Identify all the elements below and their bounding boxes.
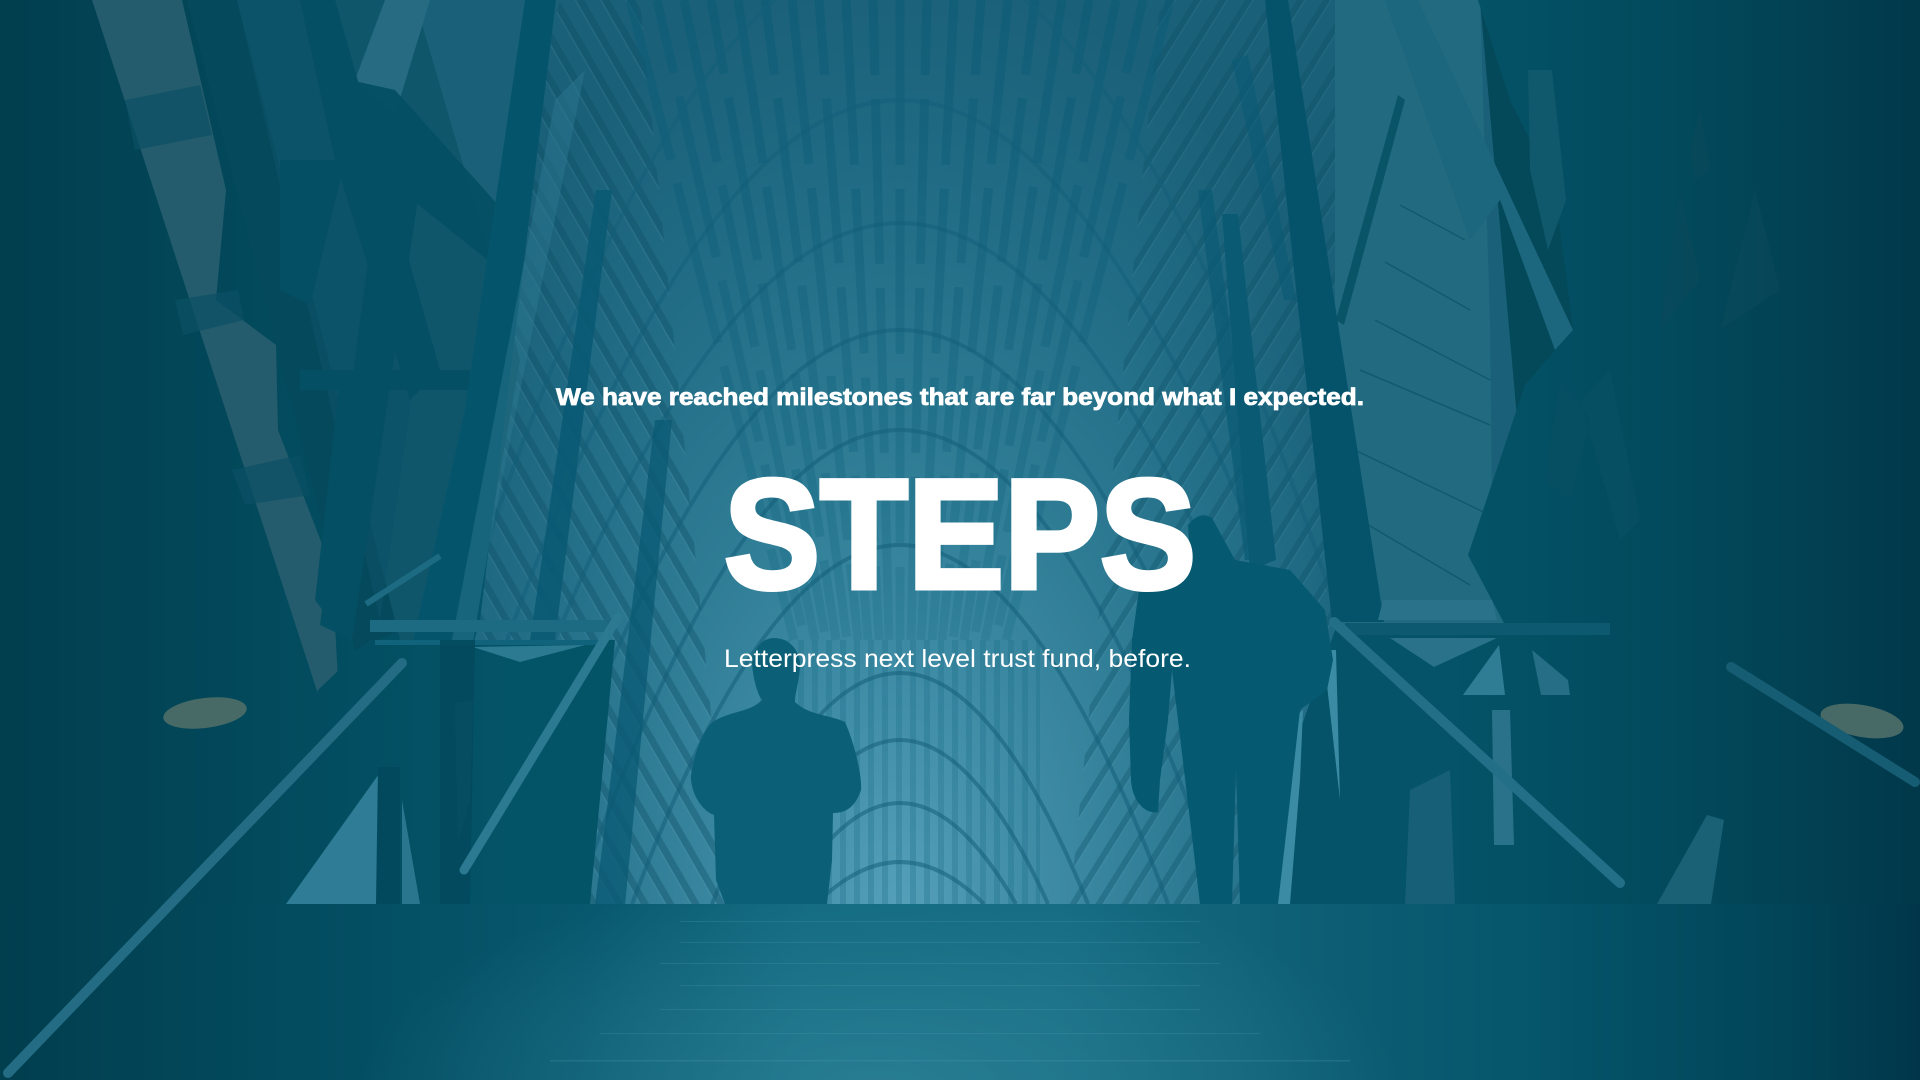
secondary columns right [1198,55,1296,570]
ceiling lamps [161,693,1906,744]
right dark wall [1468,0,1920,904]
title: STEPS [724,448,1196,622]
glass vault [422,0,1516,904]
post left [376,640,475,904]
thin strut right [1336,95,1405,325]
stairs [0,904,1920,1080]
silhouette: walker right [1129,515,1333,904]
balcony left [286,556,607,904]
pale column left [452,70,585,660]
tagline: We have reached milestones that are far beyond what I expected. [556,384,1364,411]
pale roof beam left [355,0,430,115]
main column left [400,0,556,700]
main column right [1265,0,1384,622]
pale roof panel right [1335,0,1510,625]
lower dark masses [290,630,1920,904]
subtitle: Letterpress next level trust fund, before. [724,645,1191,673]
silhouette: man left [691,638,861,904]
stair rails [8,617,1915,1073]
left wall and streak [0,0,420,904]
balcony right [1272,600,1724,904]
mid lattice left [237,0,520,640]
dark cross beams left [280,0,525,640]
pale beam right [1385,0,1573,350]
rib columns left [530,190,672,905]
